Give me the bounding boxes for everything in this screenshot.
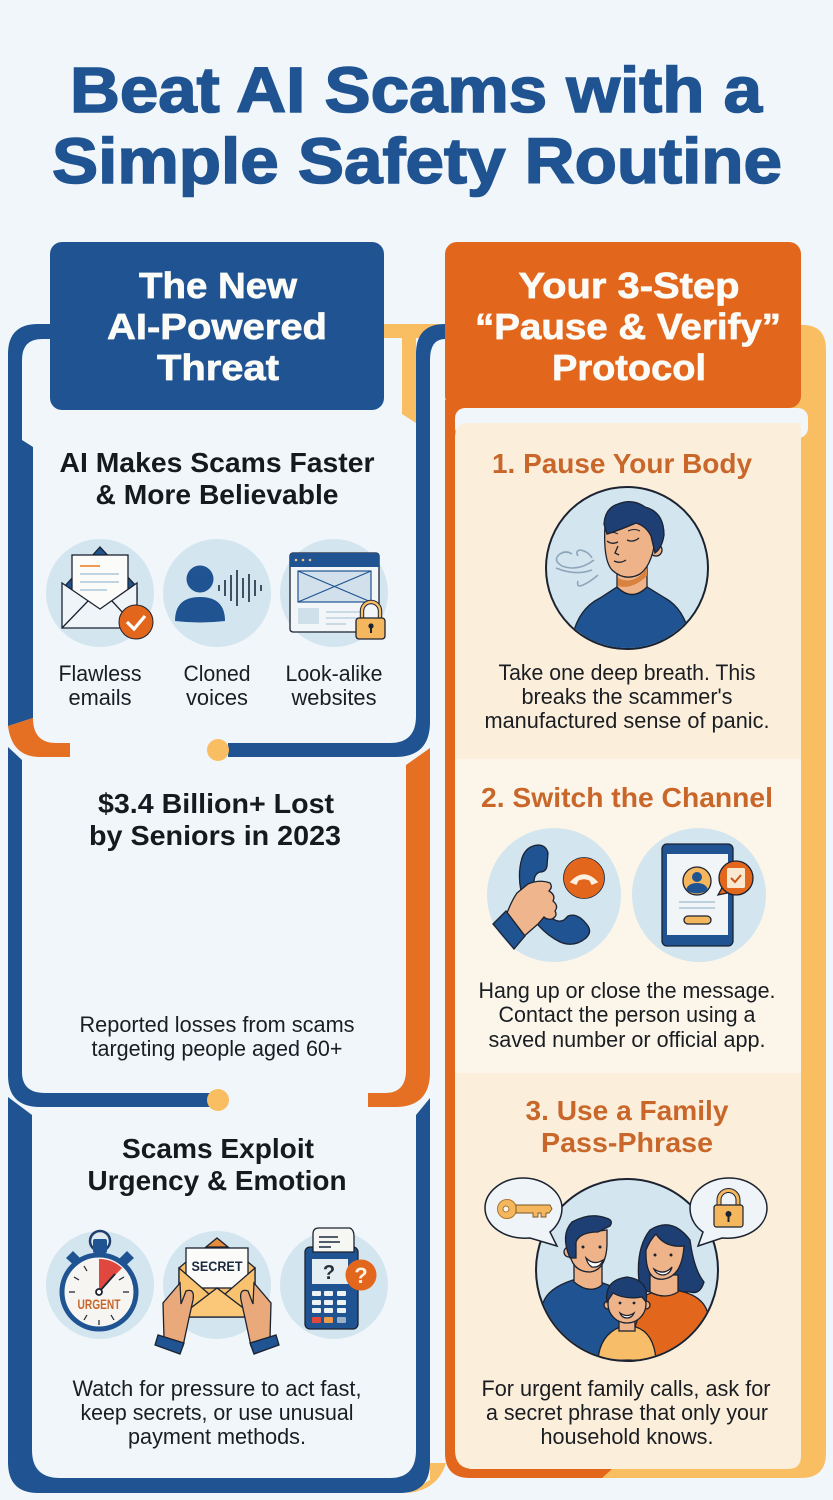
text: reported losses: targeting people aged 60+ [92, 1036, 342, 1061]
icon: key speech bubble [485, 1178, 562, 1246]
illustration: family with pass-phrase [485, 1178, 767, 1370]
labels: AI scam types: emails [68, 685, 132, 710]
text: watch for pressure: Watch for pressure to act fast, [72, 1376, 362, 1401]
text: step 2 description: Contact the person using a [498, 1002, 756, 1027]
text: step 3 description: household knows. [540, 1424, 714, 1449]
panel: the new AI-powered threat column [8, 242, 446, 1493]
icon: payment terminal: ? [323, 1262, 335, 1284]
heading: losses statistic: by Seniors in 2023 [89, 820, 341, 851]
text: watch for pressure: keep secrets, or use unusual [80, 1400, 354, 1425]
text: step 2 description: saved number or official app. [488, 1027, 766, 1052]
icon: lock speech bubble [690, 1178, 767, 1246]
heading: step 1: 1. Pause Your Body [492, 448, 752, 479]
heading: step 3 [526, 1095, 729, 1158]
heading: the new AI-powered threat: Threat [157, 347, 279, 388]
text: watch for pressure [72, 1376, 362, 1449]
labels: AI scam types [58, 661, 382, 710]
heading: step 2: 2. Switch the Channel [481, 782, 773, 813]
text: step 3 description: a secret phrase that only your [486, 1400, 768, 1425]
text: step 2 description: Hang up or close the message. [478, 978, 776, 1003]
icon: urgent stopwatch: URGENT [78, 1296, 121, 1312]
icon: cloned voice [163, 539, 271, 647]
heading: your 3-step protocol: Protocol [552, 347, 706, 388]
text: step 2 description [478, 978, 776, 1052]
labels: AI scam types: Cloned [184, 661, 250, 686]
text: step 3 description [482, 1376, 770, 1449]
title: Beat AI Scams with a [70, 54, 762, 126]
heading: AI makes scams faster: AI Makes Scams Faster [60, 447, 375, 478]
heading: scams exploit urgency [88, 1133, 346, 1196]
icon: flawless email [46, 539, 154, 647]
heading: step 3: 3. Use a Family [526, 1095, 729, 1126]
heading: AI makes scams faster [60, 447, 375, 510]
title [52, 54, 782, 197]
text: reported losses: Reported losses from scams [80, 1012, 354, 1037]
frame: left column connectors [8, 324, 446, 1493]
labels: AI scam types: voices [186, 685, 248, 710]
icon: urgent stopwatch [46, 1231, 154, 1339]
heading: AI makes scams faster: & More Believable [96, 479, 338, 510]
heading: scams exploit urgency: Urgency & Emotion [88, 1165, 346, 1196]
heading: losses statistic: $3.4 Billion+ Lost [98, 788, 334, 819]
heading: the new AI-powered threat: AI-Powered [107, 306, 327, 347]
title: Simple Safety Routine [52, 125, 782, 197]
text: step 1 description: manufactured sense of panic. [484, 708, 770, 733]
icon: look-alike website [280, 539, 388, 647]
heading: the new AI-powered threat: The New [139, 265, 298, 306]
icon: payment terminal: ? [354, 1263, 368, 1288]
text: watch for pressure: payment methods. [128, 1424, 306, 1449]
heading: the new AI-powered threat [50, 242, 384, 410]
heading: your 3-step protocol: “Pause & Verify” [475, 306, 781, 347]
heading: step 3: Pass-Phrase [541, 1127, 713, 1158]
frame: right column [445, 325, 826, 1478]
heading: scams exploit urgency: Scams Exploit [122, 1133, 314, 1164]
heading: your 3-step protocol [445, 242, 801, 408]
labels: AI scam types: Look-alike [286, 661, 382, 686]
heading: your 3-step protocol: Your 3-Step [518, 265, 740, 306]
icon: secret envelope in hands: SECRET [192, 1259, 243, 1274]
heading: losses statistic [89, 788, 341, 851]
labels: AI scam types: websites [291, 685, 376, 710]
icon: secret envelope in hands [155, 1231, 279, 1354]
icon: payment terminal [280, 1228, 388, 1339]
text: reported losses [80, 1012, 354, 1061]
text: step 1 description: breaks the scammer's [522, 684, 732, 709]
panel: pause and verify protocol column [445, 242, 826, 1478]
icon: hanging up phone [487, 828, 621, 962]
text: step 1 description: Take one deep breath. This [498, 660, 756, 685]
labels: AI scam types: Flawless [58, 661, 142, 686]
text: step 3 description: For urgent family calls, ask for [482, 1376, 770, 1401]
text: step 1 description [484, 660, 770, 733]
icon: tablet with contact [632, 828, 766, 962]
illustration: person taking a breath [546, 487, 708, 655]
